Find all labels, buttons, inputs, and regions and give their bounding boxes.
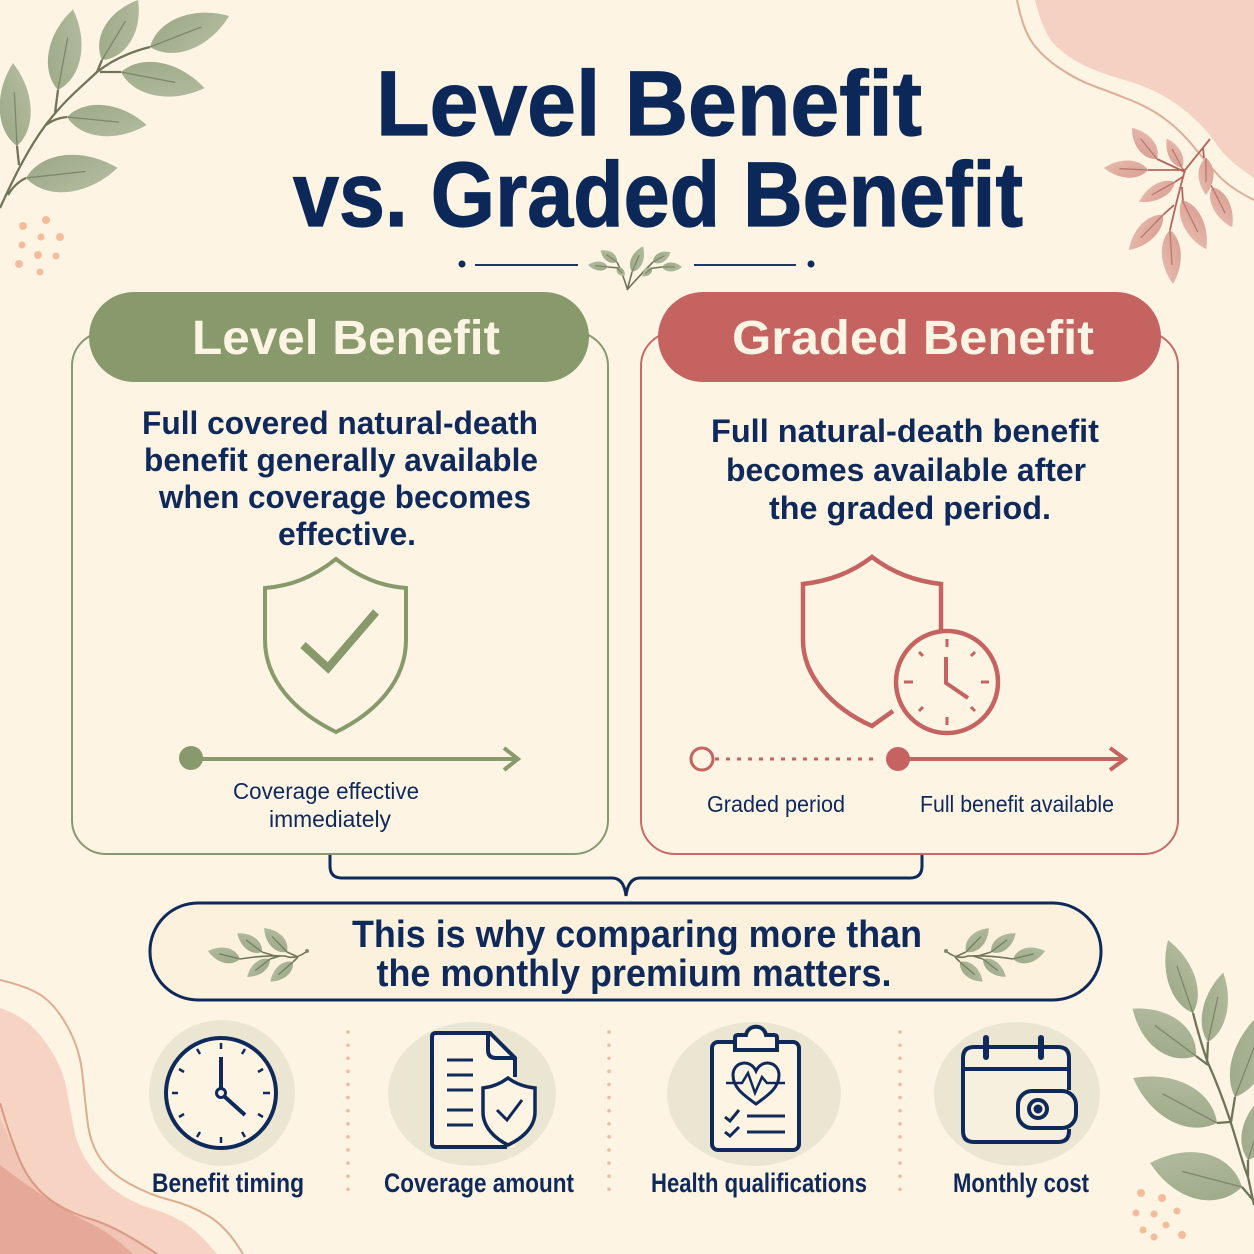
title: Level Benefit xyxy=(376,53,922,155)
panel header xyxy=(658,292,1161,382)
item: health qualifications xyxy=(651,1022,867,1198)
icon: shield with clock xyxy=(803,557,998,733)
panel border xyxy=(72,332,608,854)
timeline labels: Graded period xyxy=(707,791,845,817)
icon: right sprig xyxy=(944,923,1047,987)
description: Full natural-death benefit xyxy=(711,413,1099,449)
timeline label: immediately xyxy=(269,806,391,832)
icon: clipboard xyxy=(667,1022,841,1166)
decoration: top left dots xyxy=(15,216,64,276)
decoration: top left branch xyxy=(0,0,235,208)
panel header xyxy=(89,292,589,382)
description xyxy=(142,405,538,552)
description: becomes available after xyxy=(726,452,1086,488)
description: when coverage becomes xyxy=(158,479,531,515)
timeline label xyxy=(233,778,419,832)
callout text: This is why comparing more than xyxy=(352,914,922,956)
item: monthly cost xyxy=(934,1022,1100,1198)
timeline labels: Full benefit available xyxy=(920,791,1114,817)
icon: left sprig xyxy=(206,923,309,987)
callout xyxy=(150,903,1101,1000)
description xyxy=(711,413,1099,526)
timeline labels xyxy=(707,791,1114,817)
icon: clock xyxy=(149,1020,295,1166)
panel: graded benefit xyxy=(641,292,1178,854)
icon: shield check xyxy=(265,559,406,732)
label: Coverage amount xyxy=(384,1168,574,1198)
panel header: Level Benefit xyxy=(192,312,500,365)
decoration: top right blob xyxy=(1017,0,1254,200)
title divider ornament xyxy=(458,244,814,290)
panel header: Graded Benefit xyxy=(732,312,1094,365)
icon: calendar wallet xyxy=(934,1022,1100,1166)
bracket connector xyxy=(330,855,922,896)
callout text: the monthly premium matters. xyxy=(376,953,892,995)
description: the graded period. xyxy=(769,490,1051,526)
panel border xyxy=(641,332,1178,854)
decoration: top right branch xyxy=(1104,123,1240,284)
label: Health qualifications xyxy=(651,1168,867,1198)
column dividers xyxy=(348,1032,900,1192)
timeline arrow xyxy=(179,746,518,770)
description: benefit generally available xyxy=(144,442,538,478)
timeline label: Coverage effective xyxy=(233,778,419,804)
decoration: bottom right dots xyxy=(1132,1189,1186,1240)
decoration: bottom left blob xyxy=(0,980,243,1254)
panel: level benefit xyxy=(72,292,608,854)
title: vs. Graded Benefit xyxy=(293,144,1023,246)
label: Monthly cost xyxy=(953,1168,1089,1198)
callout text xyxy=(352,914,922,995)
label: Benefit timing xyxy=(152,1168,304,1198)
timeline arrow xyxy=(691,747,1125,771)
decoration: bottom right branch xyxy=(1122,936,1254,1209)
icon: document with shield xyxy=(388,1022,556,1166)
item: benefit timing xyxy=(149,1020,304,1198)
title xyxy=(293,53,1023,246)
description: effective. xyxy=(278,516,416,552)
description: Full covered natural-death xyxy=(142,405,538,441)
item: coverage amount xyxy=(384,1022,574,1198)
